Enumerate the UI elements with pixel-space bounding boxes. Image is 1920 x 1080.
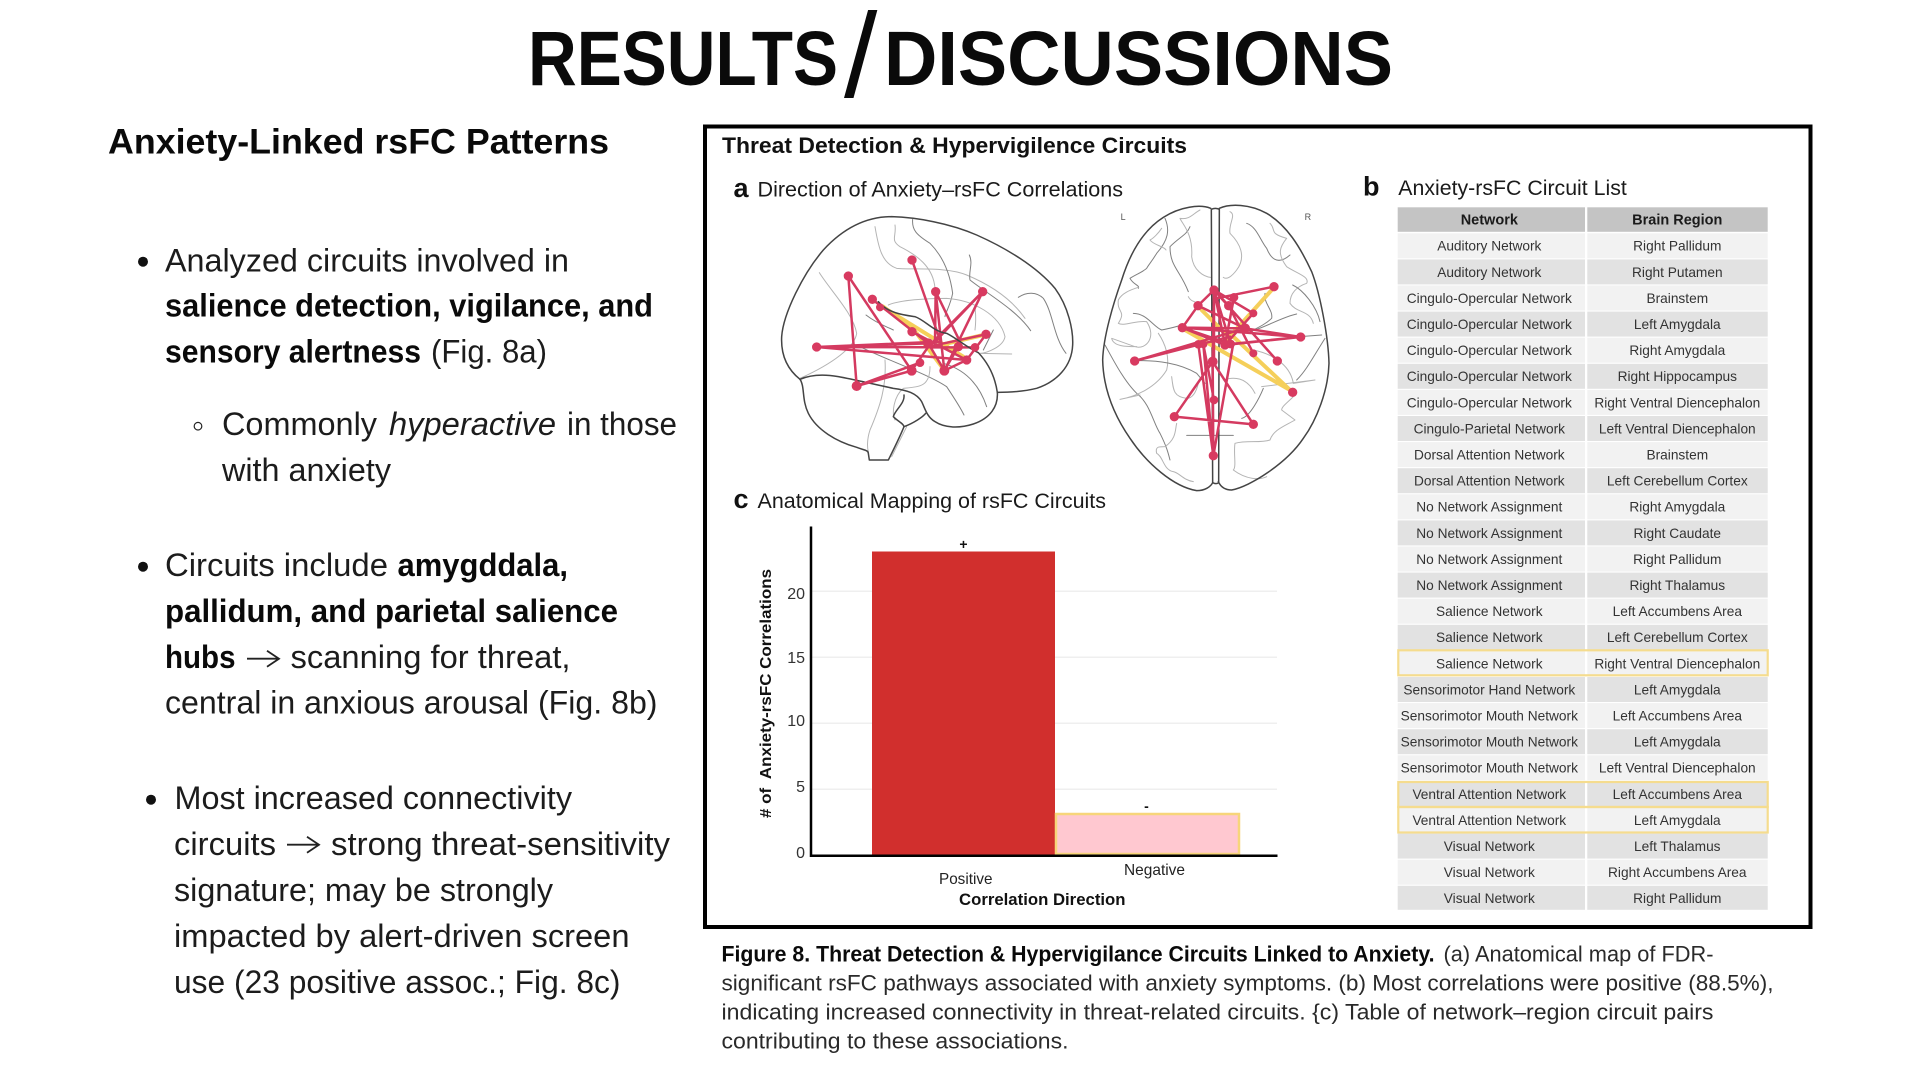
row 7: Right Ventral Diencephalon [1594, 395, 1760, 410]
row 4 [1398, 312, 1768, 337]
row 9: Dorsal Attention Network [1414, 448, 1565, 462]
sub-bullet: hyperactive: Commonly [222, 406, 377, 442]
row 1 [1398, 233, 1768, 258]
y tick labels: 15 [787, 650, 805, 667]
row 2: Auditory Network [1437, 265, 1542, 280]
y tick labels: 10 [787, 713, 805, 730]
bar: positive [872, 552, 1055, 855]
bullet 3: Most increased connectivity [174, 780, 572, 816]
bullet 1: salience detection, vigilance, and [165, 288, 653, 324]
hemisphere label R: R [1305, 212, 1312, 222]
row 12 [1398, 520, 1768, 545]
y tick labels: 20 [787, 586, 805, 603]
row 24: Left Thalamus [1634, 839, 1721, 854]
caption [722, 942, 1774, 1054]
arrow [247, 651, 279, 667]
row 20 [1398, 729, 1768, 754]
sub-bullet: hyperactive: in those [567, 406, 677, 442]
bullet 2 [138, 547, 658, 721]
caption: (a) Anatomical map of FDR- [1444, 942, 1714, 966]
row 13: No Network Assignment [1416, 552, 1563, 567]
x label positive: Positive [939, 871, 993, 888]
row 10 [1398, 468, 1768, 493]
bullet 3: circuits [174, 826, 276, 862]
panel heading: Threat Detection & Hypervigilence Circuits: Threat Detection & Hypervigilence Circuits [722, 133, 1187, 158]
sub-heading a: Direction of Anxiety–rsFC Correlations [758, 178, 1123, 202]
row 18: Left Amygdala [1634, 682, 1721, 697]
row 5: Right Amygdala [1629, 343, 1726, 358]
row 4: Cingulo-Opercular Network [1407, 317, 1572, 332]
row 7 [1398, 390, 1768, 415]
row 16: Left Cerebellum Cortex [1607, 630, 1748, 645]
row 12: No Network Assignment [1416, 526, 1563, 541]
bullet 2: hubs [165, 639, 236, 675]
network nodes: axial [1131, 283, 1304, 459]
row 15 [1398, 599, 1768, 624]
caption: contributing to these associations. [722, 1028, 1068, 1054]
row 22 highlighted [1398, 781, 1768, 806]
row 22 highlighted: Left Accumbens Area [1613, 787, 1742, 802]
row 2: Right Putamen [1632, 265, 1723, 280]
row 19 [1398, 703, 1768, 728]
sub-bullet: hyperactive: hyperactive [389, 406, 556, 442]
row 6: Right Hippocampus [1618, 369, 1737, 384]
y tick labels: 0 [796, 845, 805, 862]
sub-heading c: Anatomical Mapping of rsFC Circuits [758, 490, 1106, 513]
arrow [287, 837, 319, 853]
x label negative: Negative [1124, 862, 1185, 879]
row 3: Brainstem [1646, 291, 1708, 306]
row 26 [1398, 886, 1768, 910]
row 24 [1398, 834, 1768, 859]
table header: Network [1461, 212, 1519, 228]
y tick labels [787, 586, 805, 862]
panel: text column [108, 122, 677, 1000]
sub-bullet: hyperactive [194, 406, 677, 488]
row 26: Visual Network [1444, 891, 1535, 906]
bullet 1: sensory alertness [165, 334, 421, 370]
row 3: Cingulo-Opercular Network [1407, 291, 1572, 306]
row 13: Right Pallidum [1633, 552, 1721, 567]
row 19: Sensorimotor Mouth Network [1401, 708, 1578, 724]
bullet 1: Analyzed circuits involved in [165, 243, 569, 279]
bullet 3: impacted by alert-driven screen [174, 918, 630, 954]
row 26: Right Pallidum [1633, 891, 1721, 906]
row 15: Salience Network [1436, 604, 1543, 619]
row 20: Left Amygdala [1634, 735, 1721, 750]
hemisphere label L: L [1121, 212, 1126, 222]
row 18: Sensorimotor Hand Network [1403, 682, 1575, 697]
row 20: Sensorimotor Mouth Network [1401, 735, 1578, 750]
row 17 highlighted: Salience Network [1436, 656, 1543, 671]
row 5: Cingulo-Opercular Network [1407, 343, 1572, 358]
brain: axial view [1103, 205, 1329, 491]
row 8 [1398, 416, 1768, 441]
row 15: Left Accumbens Area [1613, 604, 1742, 619]
row 5 [1398, 338, 1768, 363]
title: RESULTS [528, 16, 838, 102]
bullet 2: Circuits include [165, 547, 388, 583]
network edges: axial [1135, 287, 1301, 456]
table: circuit list [1398, 207, 1768, 910]
row 11: Right Amygdala [1629, 500, 1726, 515]
heading: Anxiety-Linked rsFC Patterns: Anxiety-Linked rsFC Patterns [108, 122, 609, 162]
row 6: Cingulo-Opercular Network [1407, 369, 1572, 384]
sub-heading b: Anxiety-rsFC Circuit List [1398, 177, 1627, 200]
row 7: Cingulo-Opercular Network [1407, 395, 1572, 410]
bar: negative [1056, 814, 1239, 854]
table header: Brain Region [1632, 212, 1722, 228]
row 25: Visual Network [1444, 865, 1535, 880]
row 8: Left Ventral Diencephalon [1599, 421, 1756, 436]
brain: sagittal view [782, 217, 1073, 460]
row 10: Dorsal Attention Network [1414, 474, 1565, 489]
bullet 3: strong threat-sensitivity [331, 826, 670, 862]
row 11 [1398, 494, 1768, 519]
caption: indicating increased connectivity in threat-related circuits. {c) Table of network–region circuit pairs [722, 1000, 1714, 1024]
row 18 [1398, 677, 1768, 702]
sub-heading b [1363, 172, 1627, 202]
x axis title: Correlation Direction [959, 891, 1126, 909]
bullet 2: amygddala, [398, 547, 568, 583]
row 6 [1398, 364, 1768, 389]
row 16: Salience Network [1436, 630, 1543, 645]
row 21: Sensorimotor Mouth Network [1401, 761, 1578, 776]
row 25: Right Accumbens Area [1608, 865, 1747, 880]
bullet 2: central in anxious arousal (Fig. 8b) [165, 685, 658, 721]
row 17 highlighted: Right Ventral Diencephalon [1594, 656, 1760, 671]
row 3 [1398, 286, 1768, 310]
row 11: No Network Assignment [1416, 500, 1563, 515]
bullet 1: (Fig. 8a) [431, 334, 547, 370]
sub-heading a: a [734, 173, 750, 203]
row 10: Left Cerebellum Cortex [1607, 474, 1748, 489]
bar marker minus: - [1144, 798, 1149, 814]
bar chart [758, 526, 1278, 909]
table header [1398, 207, 1768, 232]
caption: Figure 8. Threat Detection & Hypervigilance Circuits Linked to Anxiety. [722, 942, 1434, 966]
highlight outlines [1398, 650, 1768, 832]
network edges: sagittal [817, 260, 986, 386]
bullet 2: pallidum, and parietal salience [165, 593, 618, 629]
y tick labels: 5 [796, 779, 805, 796]
bar marker plus: + [959, 536, 968, 552]
row 14 [1398, 573, 1768, 598]
row 16 [1398, 625, 1768, 650]
row 22 highlighted: Ventral Attention Network [1412, 787, 1566, 802]
row 21: Left Ventral Diencephalon [1599, 761, 1756, 776]
row 2 [1398, 259, 1768, 284]
row 4: Left Amygdala [1634, 317, 1721, 332]
row 21 [1398, 755, 1768, 780]
bullet 3 [146, 780, 670, 1000]
row 23 highlighted: Ventral Attention Network [1412, 813, 1566, 828]
row 24: Visual Network [1444, 839, 1535, 854]
row 14: No Network Assignment [1416, 578, 1563, 593]
row 14: Right Thalamus [1629, 578, 1725, 593]
bullet 2: scanning for threat, [290, 639, 570, 675]
row 23 highlighted [1398, 808, 1768, 832]
row 17 highlighted [1398, 651, 1768, 676]
bullet 3: signature; may be strongly [174, 872, 553, 908]
y axis title: # of Anxiety-rsFC Correlations [758, 569, 775, 818]
row 19: Left Accumbens Area [1613, 708, 1742, 724]
row 9: Brainstem [1646, 448, 1708, 462]
row 25 [1398, 860, 1768, 885]
axes [811, 526, 1278, 856]
sub-heading c: c [734, 484, 749, 514]
bullet 3: use (23 positive assoc.; Fig. 8c) [174, 964, 620, 1000]
panel: figure frame [705, 126, 1810, 927]
row 12: Right Caudate [1634, 526, 1721, 541]
bullet 1 [138, 243, 653, 370]
title: DISCUSSIONS [884, 16, 1393, 102]
title [528, 0, 1393, 123]
row 1: Right Pallidum [1633, 239, 1721, 254]
row 23 highlighted: Left Amygdala [1634, 813, 1721, 828]
sub-bullet: hyperactive: with anxiety [221, 452, 391, 488]
row 8: Cingulo-Parietal Network [1414, 421, 1565, 436]
row 9 [1398, 442, 1768, 467]
caption: significant rsFC pathways associated with anxiety symptoms. (b) Most correlations were positive (88.5%), [722, 970, 1774, 996]
row 13 [1398, 546, 1768, 572]
row 1: Auditory Network [1437, 239, 1542, 254]
network nodes: sagittal [813, 257, 989, 390]
sub-heading b: b [1363, 172, 1380, 202]
